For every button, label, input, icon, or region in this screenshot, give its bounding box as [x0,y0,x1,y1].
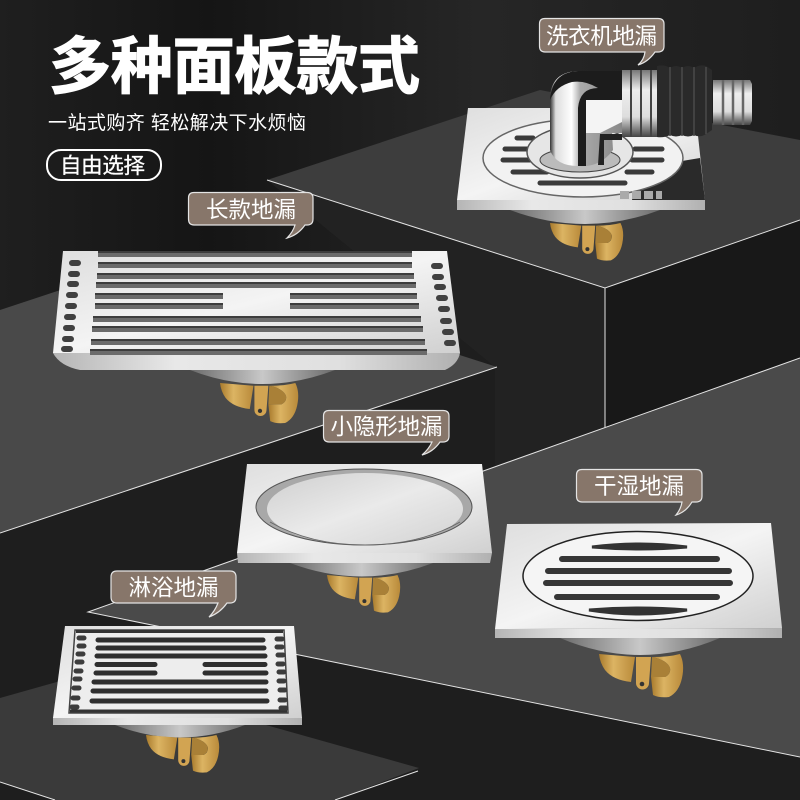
subtitle: 一站式购齐 轻松解决下水烦恼 [48,112,306,134]
label: wet and dry drain: 干湿地漏 [594,474,684,499]
label: wet and dry drain [576,470,702,515]
label: long drain: 长款地漏 [206,198,296,222]
tag: free choice [47,150,161,180]
label: shower drain: 淋浴地漏 [128,576,218,600]
drain: shower [53,626,302,773]
label: invisible drain: 小隐形地漏 [330,414,442,440]
drain: wet and dry [495,523,782,697]
drain: washing machine [457,65,752,261]
tag: free choice: 自由选择 [60,154,145,178]
label: washing machine drain: 洗衣机地漏 [546,24,657,49]
label: invisible drain [324,410,449,455]
title: 多种面板款式 [49,33,420,102]
drain: invisible [237,464,492,613]
label: long drain [188,192,313,238]
drain: long [53,251,460,423]
label: washing machine drain [540,18,664,65]
label: shower drain [111,571,236,617]
